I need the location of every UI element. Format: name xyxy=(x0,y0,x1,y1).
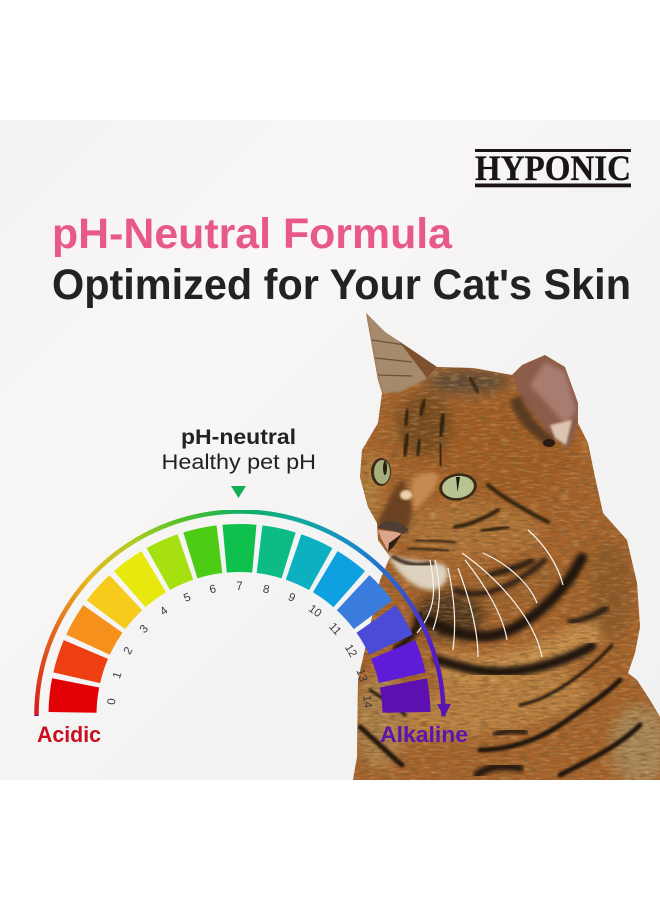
pH gauge segments and numbers: 2 xyxy=(122,645,135,657)
body stripes xyxy=(360,558,640,775)
body tones xyxy=(431,610,607,686)
left ear xyxy=(366,313,437,393)
logo: HYPONIC: HYPONIC xyxy=(475,148,631,188)
pH gauge segments and numbers: 7 xyxy=(236,581,243,593)
pH gauge segments and numbers: 10 xyxy=(306,603,323,620)
head tones xyxy=(438,406,568,494)
pH gauge segments and numbers: 9 xyxy=(286,591,297,605)
pH gauge segments and numbers: 8 xyxy=(262,583,270,596)
gauge arc xyxy=(30,510,450,716)
face bridge xyxy=(377,478,412,536)
nose xyxy=(378,530,402,552)
face stripes xyxy=(404,378,548,551)
photo: tabby cat xyxy=(353,313,660,780)
pH gauge segments and numbers: 11 xyxy=(326,621,343,638)
pH gauge segments and numbers: 5 xyxy=(182,591,193,605)
muzzle and ruff xyxy=(386,552,448,590)
fur texture xyxy=(340,310,660,780)
pH gauge segments and numbers: 13 xyxy=(354,668,369,683)
title: Optimized for Your Cat's Skin xyxy=(52,261,631,309)
gauge label: pH-neutral: pH-neutral xyxy=(181,426,296,449)
pH gauge segments and numbers: 0 xyxy=(106,698,119,705)
pH gauge segments and numbers: 6 xyxy=(209,583,217,596)
gauge label: pH-neutral: Healthy pet pH xyxy=(162,451,316,474)
label: Alkaline: Alkaline xyxy=(380,722,468,747)
whiskers xyxy=(417,530,563,657)
pH gauge segments and numbers: 14 xyxy=(360,695,373,709)
label: Acidic: Acidic xyxy=(37,722,101,747)
right ear xyxy=(512,355,578,450)
fur base xyxy=(340,310,660,780)
pH gauge segments and numbers: 12 xyxy=(342,642,359,660)
eyes xyxy=(371,458,391,486)
background panel xyxy=(0,120,660,780)
title: pH-Neutral Formula xyxy=(52,210,453,258)
pH gauge segments and numbers: 1 xyxy=(111,671,124,680)
pH gauge segments and numbers: 4 xyxy=(158,604,171,618)
pH gauge segments and numbers: 3 xyxy=(138,623,151,636)
